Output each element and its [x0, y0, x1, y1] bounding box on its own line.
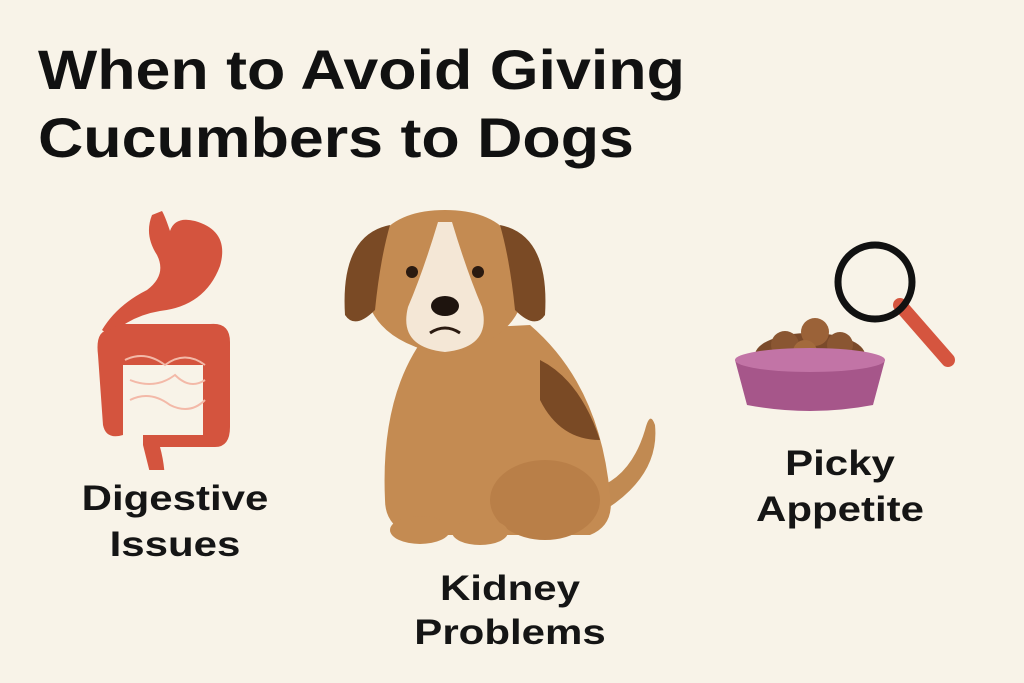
label: picky: [756, 444, 924, 529]
label: digestive: [82, 479, 268, 564]
label: digestive: Issues: [110, 525, 240, 564]
title: Cucumbers to Dogs: [38, 106, 634, 169]
label: kidney: [414, 569, 606, 652]
icon: bowl with magnifier: [735, 242, 955, 411]
title: When to Avoid Giving: [38, 38, 685, 101]
icon: dog: [344, 210, 656, 545]
label: kidney: Kidney: [440, 569, 580, 608]
label: kidney: Problems: [414, 613, 606, 652]
label: digestive: Digestive: [82, 479, 268, 518]
title: [38, 38, 685, 169]
label: picky: Picky: [785, 444, 895, 483]
label: picky: Appetite: [756, 490, 924, 529]
icon: stomach and intestines: [98, 211, 230, 470]
